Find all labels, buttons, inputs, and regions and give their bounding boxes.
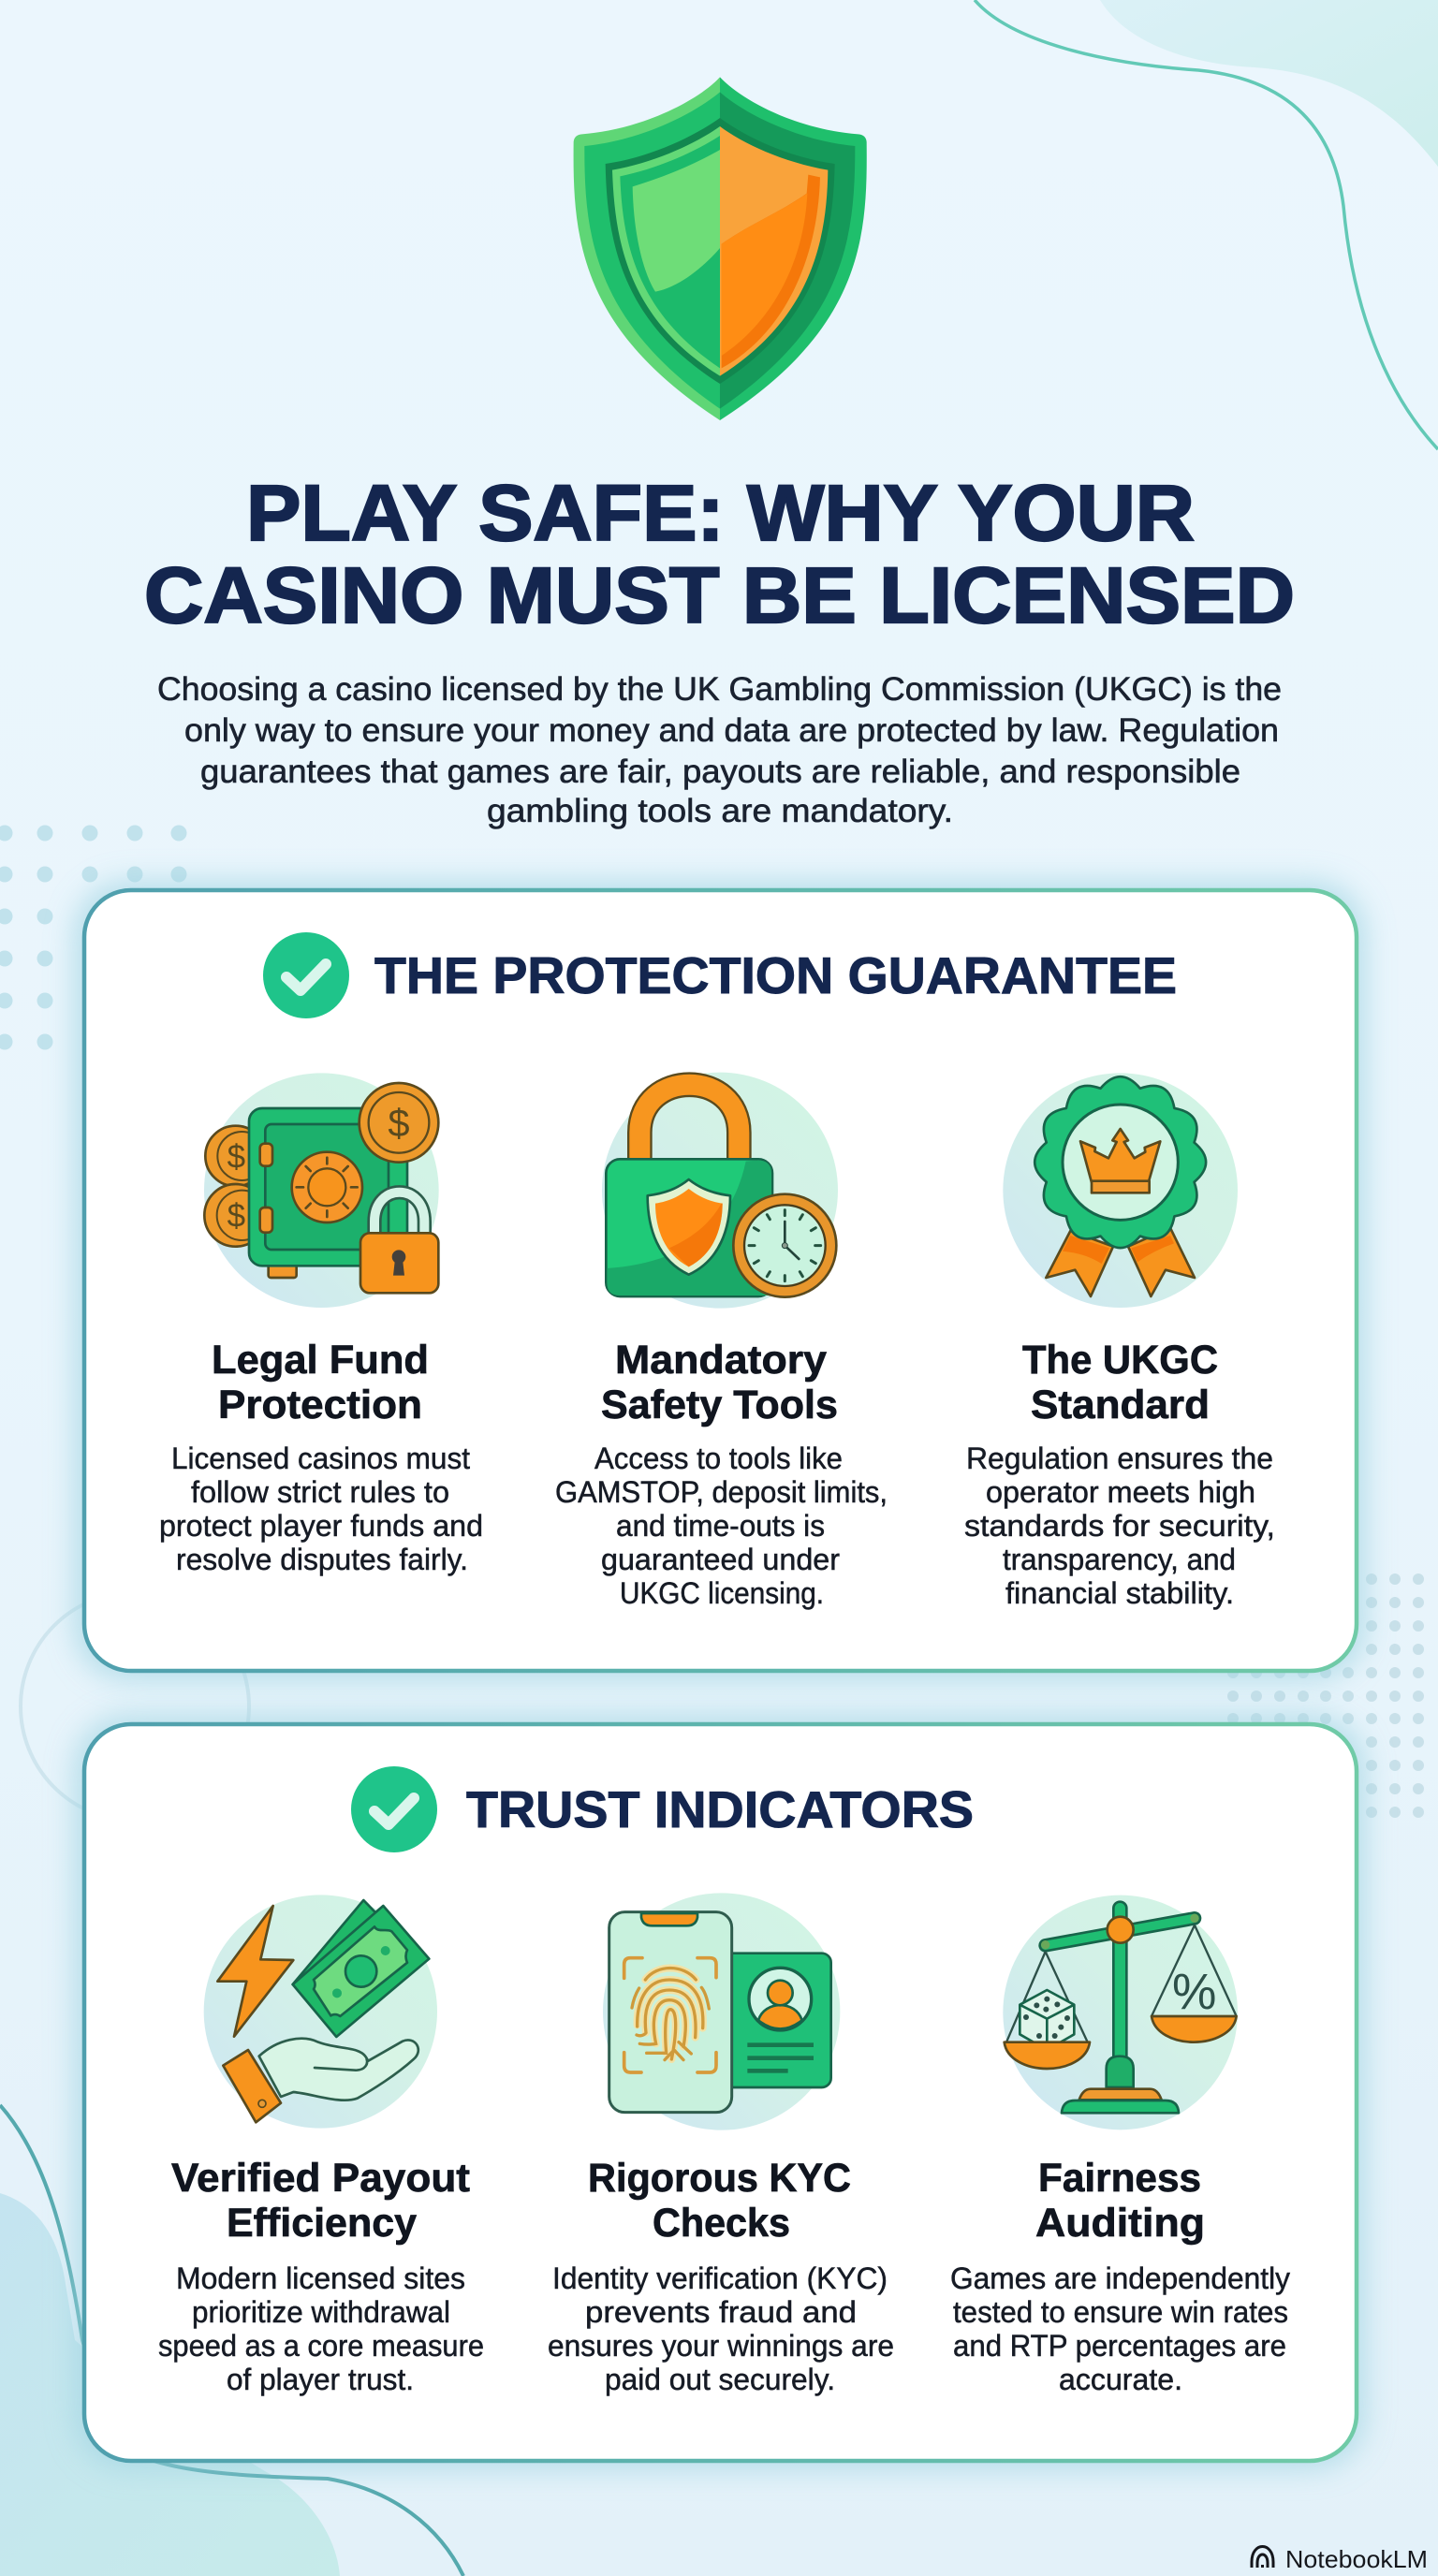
item text: fairness auditing: tested to ensure win rates [953,2295,1288,2329]
item text: legal fund protection: Licensed casinos must [171,1442,470,1475]
heading: trust indicators: TRUST INDICATORS [466,1780,974,1838]
item text: rigorous kyc checks [548,2261,894,2396]
icon: safe with coins and padlock: $ [227,1198,245,1235]
heading: trust indicators [351,1766,974,1852]
dot grid: right [1227,1573,1424,1818]
item text: verified payout efficiency: speed as a core measure [158,2329,484,2363]
item text: mandatory safety tools [555,1442,888,1610]
heading: protection guarantee [263,932,1177,1018]
item text: rigorous kyc checks: prevents fraud and [585,2295,857,2329]
item title: verified payout efficiency: Efficiency [227,2201,417,2246]
item text: fairness auditing [950,2261,1290,2396]
panel: the protection guarantee [75,882,1365,1679]
item title: fairness auditing: Auditing [1035,2201,1205,2246]
item text: the ukgc standard: operator meets high [986,1475,1255,1509]
item title: legal fund protection: Legal Fund [212,1338,429,1383]
icon: padlock with shield and clock [602,1073,838,1309]
intro text [157,671,1282,829]
icon: safe with coins and padlock [204,1073,439,1308]
item title: legal fund protection: Protection [218,1383,422,1427]
item title: verified payout efficiency: Verified Payout [171,2156,470,2201]
icon: lightning, banknotes and hand [204,1895,437,2129]
item text: mandatory safety tools: UKGC licensing. [620,1576,824,1610]
item title: fairness auditing: Fairness [1038,2156,1201,2201]
item title: mandatory safety tools: Mandatory [615,1338,827,1383]
item text: mandatory safety tools: and time-outs is [616,1509,825,1543]
decorative blob: top right [1100,0,1438,167]
item text: verified payout efficiency: Modern licensed sites [176,2261,465,2295]
item text: the ukgc standard: transparency, and [1003,1543,1236,1576]
item text: the ukgc standard [964,1442,1275,1610]
item title: the ukgc standard: The UKGC [1022,1338,1218,1383]
intro text: only way to ensure your money and data are protected by law. Regulation [184,712,1279,749]
decorative ring: left [21,1592,249,1821]
icon: safe with coins and padlock: $ [388,1101,410,1145]
item text: legal fund protection: resolve disputes fairly. [176,1543,468,1576]
item text: rigorous kyc checks: Identity verification (KYC) [552,2261,888,2295]
decorative curve: top right [975,0,1438,449]
intro text: Choosing a casino licensed by the UK Gambling Commission (UKGC) is the [157,671,1282,708]
item text: legal fund protection: follow strict rules to [191,1475,449,1509]
item title: rigorous kyc checks: Rigorous KYC [588,2156,851,2201]
item title: the ukgc standard: Standard [1031,1383,1210,1427]
item title: rigorous kyc checks: Checks [653,2201,790,2246]
item text: mandatory safety tools: Access to tools like [594,1442,843,1475]
item text: the ukgc standard: Regulation ensures the [966,1442,1273,1475]
icon: safe with coins and padlock: $ [227,1138,245,1175]
icon: phone fingerprint and id card [603,1893,840,2130]
decorative blob: bottom left [0,2193,340,2576]
icon: shield [574,77,867,420]
item text: verified payout efficiency: prioritize withdrawal [192,2295,450,2329]
item text: fairness auditing: accurate. [1059,2363,1182,2396]
title: PLAY SAFE: WHY YOUR [246,469,1195,557]
item text: fairness auditing: Games are independently [950,2261,1290,2295]
icon: rosette with crown [1003,1073,1238,1308]
item title: rigorous kyc checks [588,2156,851,2246]
item text: verified payout efficiency: of player trust. [227,2363,414,2396]
title [144,469,1295,639]
item text: legal fund protection [159,1442,483,1576]
heading: protection guarantee: THE PROTECTION GUARANTEE [374,946,1177,1004]
item title: the ukgc standard [1022,1338,1218,1427]
item title: mandatory safety tools [601,1338,838,1427]
intro text: guarantees that games are fair, payouts are reliable, and responsible [200,754,1240,790]
item text: mandatory safety tools: GAMSTOP, deposit limits, [555,1475,888,1509]
dot grid: left [0,826,187,1050]
item title: verified payout efficiency [171,2156,470,2246]
item text: rigorous kyc checks: paid out securely. [605,2363,835,2396]
item text: the ukgc standard: standards for security, [964,1509,1275,1543]
icon: balance scales with dice and percent [1003,1895,1238,2130]
item text: rigorous kyc checks: ensures your winnings are [548,2329,894,2363]
item title: legal fund protection [212,1338,429,1427]
item text: mandatory safety tools: guaranteed under [601,1543,840,1576]
item text: the ukgc standard: financial stability. [1005,1576,1234,1610]
item text: verified payout efficiency [158,2261,484,2396]
intro text: gambling tools are mandatory. [487,793,953,829]
watermark: notebooklm: NotebookLM [1285,2545,1428,2573]
icon: balance scales with dice and percent: % [1172,1965,1216,2020]
item title: mandatory safety tools: Safety Tools [601,1383,838,1427]
item text: fairness auditing: and RTP percentages are [953,2329,1286,2363]
item title: fairness auditing [1035,2156,1205,2246]
item text: legal fund protection: protect player funds and [159,1509,483,1543]
decorative curve: bottom left [0,2105,463,2576]
title: CASINO MUST BE LICENSED [144,551,1295,639]
panel: trust indicators [75,1716,1365,2468]
